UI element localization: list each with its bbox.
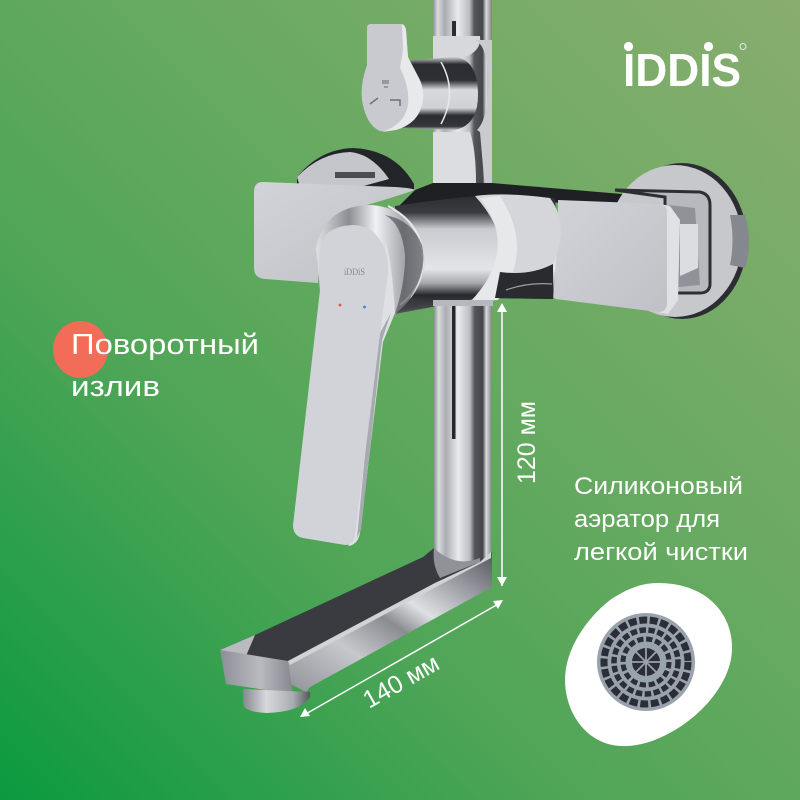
main lever handle <box>293 225 395 546</box>
text: silicone aerator <box>574 473 748 566</box>
diverter arm <box>402 57 478 130</box>
text: silicone aerator: легкой чистки <box>574 539 748 566</box>
faucet <box>220 0 749 713</box>
text: silicone aerator: Силиконовый <box>574 473 743 500</box>
spout join <box>434 548 480 578</box>
aerator nozzle <box>243 689 310 713</box>
lever logo: iDDiS <box>344 268 365 278</box>
lever face <box>293 225 388 545</box>
spout side face <box>288 552 492 692</box>
central body <box>395 194 561 314</box>
aerator callout <box>565 583 732 746</box>
heading: swivel spout: излив <box>71 371 160 403</box>
handle cup <box>316 205 433 314</box>
plate edge <box>658 204 680 314</box>
spout top dark face <box>220 548 480 661</box>
right wall rosette <box>608 163 749 319</box>
heading: swivel spout: Поворотный <box>71 329 259 361</box>
lever edge <box>345 240 395 546</box>
dimension: 120 mm: 120 мм <box>513 401 541 484</box>
logo: IDDIS: IDDIS <box>623 44 741 96</box>
left wall rosette <box>297 148 414 190</box>
heading: swivel spout <box>71 329 259 403</box>
aerator mesh <box>597 613 695 711</box>
small diverter handle <box>362 24 423 132</box>
dimension: 140 mm: 140 мм <box>358 649 444 714</box>
hot and cold markers <box>339 304 341 306</box>
left mounting plate <box>254 182 415 283</box>
spout <box>220 548 492 713</box>
lower column <box>433 300 493 565</box>
dimension: 120 mm <box>497 303 541 586</box>
dark top strip of body <box>395 183 628 210</box>
spout tip <box>220 650 293 694</box>
upper column <box>433 0 492 190</box>
red accent blob <box>53 321 108 378</box>
white blob <box>565 583 732 746</box>
dimension: 140 mm <box>300 600 503 717</box>
text: silicone aerator: аэратор для <box>574 506 720 533</box>
right mounting plate <box>553 200 667 312</box>
